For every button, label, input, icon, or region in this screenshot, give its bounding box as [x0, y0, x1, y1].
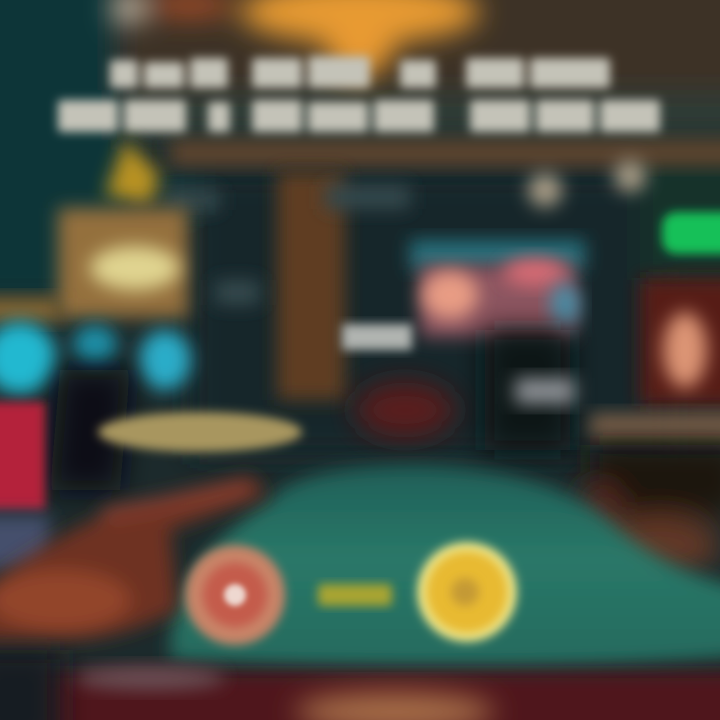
red cabinet with figure	[640, 278, 720, 406]
wall lamps	[528, 160, 646, 207]
headline (illegible blurred lettering)	[58, 56, 660, 132]
background: ceiling and walls	[0, 0, 720, 455]
framed picture	[0, 208, 188, 322]
red poker chip	[185, 545, 285, 645]
television screen	[410, 240, 585, 337]
ceiling light glow	[113, 0, 480, 77]
blue sleeve area	[0, 515, 50, 570]
wooden pillar	[277, 172, 345, 400]
brown ceiling band	[170, 140, 720, 166]
hand	[0, 475, 268, 641]
round tan table	[98, 412, 302, 452]
left dark figure	[50, 370, 130, 490]
green neon sign	[662, 212, 720, 254]
green poker table	[170, 465, 720, 669]
grey labels and dark figure	[342, 324, 575, 450]
red chair	[0, 402, 45, 510]
yellow poker chip	[417, 542, 517, 642]
yellow versus label (illegible)	[318, 584, 392, 606]
right lower furniture	[578, 445, 720, 575]
cyan lights	[0, 322, 191, 394]
side shelf	[590, 414, 720, 440]
wall signs	[165, 185, 410, 305]
table wood rim	[0, 650, 720, 720]
yellow ornament	[105, 140, 160, 205]
